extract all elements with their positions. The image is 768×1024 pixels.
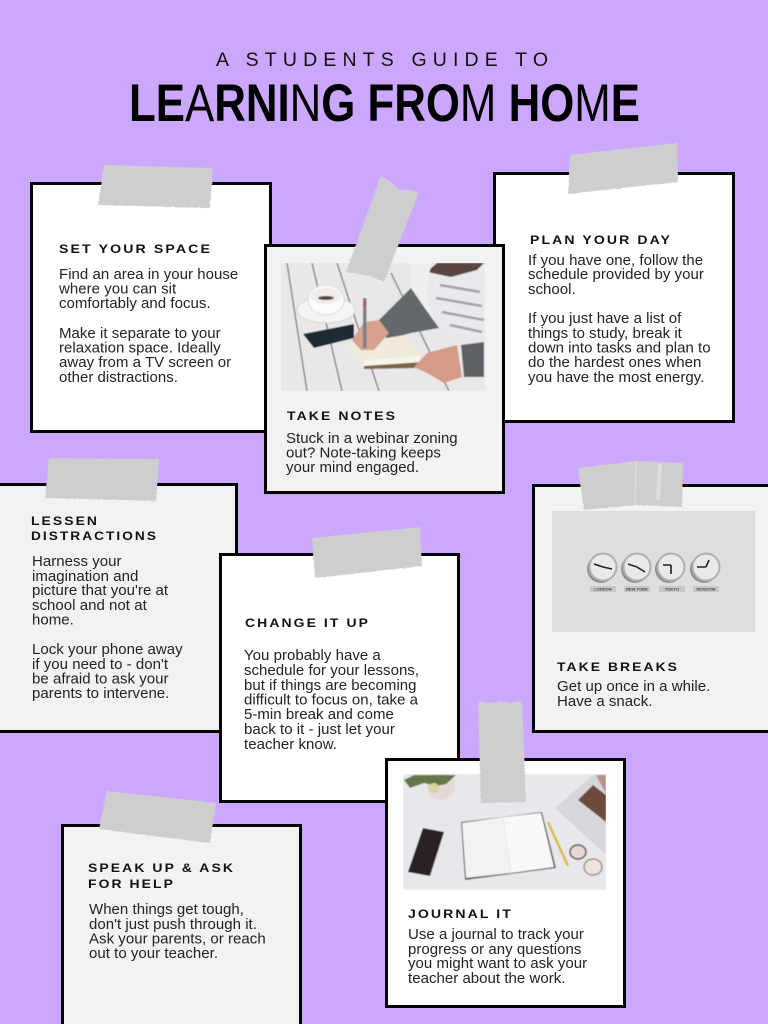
panel: set your space bbox=[32, 184, 270, 432]
text: take notes: out? Note-taking keeps bbox=[286, 444, 441, 462]
text: set your space: where you can sit bbox=[58, 280, 177, 298]
text: lessen distractions: imagination and bbox=[32, 568, 138, 585]
panel: lessen distractions bbox=[0, 484, 236, 732]
text: lessen distractions: Harness your bbox=[32, 553, 122, 570]
heading: take breaks: TAKE BREAKS bbox=[557, 660, 679, 674]
tape: set your space bbox=[98, 165, 213, 208]
text: lessen distractions: be afraid to ask your bbox=[32, 670, 169, 688]
tape: lessen distractions bbox=[45, 458, 159, 501]
photo: world clocks: TOKYO bbox=[665, 586, 679, 592]
tape: journal it bbox=[478, 701, 526, 803]
text: change it up: back to it - just let your bbox=[244, 721, 395, 738]
panel: plan your day bbox=[494, 174, 734, 422]
tape: take notes bbox=[346, 176, 419, 282]
photo: world clocks: MOSCOW bbox=[697, 586, 716, 592]
text: plan your day: do the hardest ones when bbox=[528, 354, 701, 371]
text: change it up: but if things are becoming bbox=[244, 677, 417, 694]
photo: desk with open journal bbox=[403, 772, 606, 890]
text: journal it: Use a journal to track your bbox=[408, 926, 584, 943]
text: lessen distractions: school and not at bbox=[32, 597, 148, 614]
text: speak up and ask for help: Ask your parents, or reach bbox=[89, 930, 266, 948]
text: plan your day: If you have one, follow the bbox=[528, 252, 703, 269]
heading: speak up and ask for help: FOR HELP bbox=[88, 877, 175, 891]
text: plan your day: down into tasks and plan to bbox=[528, 340, 711, 356]
text: set your space: other distractions. bbox=[59, 369, 178, 386]
text: change it up: difficult to focus on, take a bbox=[244, 692, 419, 708]
main heading: LEARNING FROM HOME bbox=[129, 74, 640, 133]
heading: lessen distractions: DISTRACTIONS bbox=[31, 529, 158, 543]
text: set your space: Find an area in your house bbox=[59, 266, 238, 283]
text: plan your day: If you just have a list of bbox=[528, 310, 682, 327]
text: set your space: Make it separate to your bbox=[59, 325, 221, 342]
panel: change it up bbox=[220, 554, 458, 802]
tape: take breaks bbox=[578, 461, 683, 510]
text: lessen distractions: Lock your phone away bbox=[32, 641, 183, 658]
text: change it up: teacher know. bbox=[244, 736, 337, 753]
text: take notes: Stuck in a webinar zoning bbox=[286, 430, 458, 447]
heading: plan your day: PLAN YOUR DAY bbox=[530, 233, 672, 247]
panel: take notes bbox=[266, 246, 504, 492]
text: journal it: progress or any questions bbox=[408, 941, 581, 958]
panel: take breaks bbox=[534, 486, 768, 732]
tape: change it up bbox=[312, 527, 422, 578]
text: set your space: comfortably and focus. bbox=[59, 295, 211, 312]
photo: woman writing in notebook bbox=[281, 263, 485, 391]
text: journal it: teacher about the work. bbox=[408, 970, 565, 987]
text: speak up and ask for help: don't just push through it. bbox=[89, 916, 257, 933]
photo: world clocks: LONDON bbox=[594, 586, 612, 592]
text: change it up: You probably have a bbox=[244, 647, 381, 664]
panel: speak up and ask for help bbox=[62, 826, 300, 1024]
text: take breaks: Have a snack. bbox=[557, 693, 652, 710]
text: plan your day: things to study, break it bbox=[528, 325, 683, 342]
heading: change it up: CHANGE IT UP bbox=[245, 616, 370, 630]
text: speak up and ask for help: When things get tough, bbox=[89, 901, 244, 918]
text: lessen distractions: if you need to - don't bbox=[32, 656, 169, 673]
text: journal it: you might want to ask your bbox=[408, 955, 587, 972]
heading: take notes: TAKE NOTES bbox=[287, 409, 397, 423]
text: plan your day: you have the most energy. bbox=[528, 369, 704, 386]
text: plan your day: school. bbox=[528, 281, 576, 298]
photo: world clocks bbox=[552, 511, 755, 632]
text: set your space: away from a TV screen or bbox=[59, 354, 231, 371]
text: take breaks: Get up once in a while. bbox=[557, 678, 710, 695]
text: lessen distractions: parents to intervene. bbox=[32, 685, 169, 702]
heading: speak up and ask for help: SPEAK UP & ASK bbox=[88, 861, 235, 875]
text: change it up: 5-min break and come bbox=[244, 706, 394, 723]
text: lessen distractions: picture that you're at bbox=[32, 582, 169, 599]
tape: speak up bbox=[99, 791, 216, 843]
text: plan your day: schedule provided by your bbox=[528, 266, 704, 283]
title bbox=[129, 49, 640, 133]
heading: lessen distractions: LESSEN bbox=[31, 514, 99, 528]
text: change it up: schedule for your lessons, bbox=[244, 662, 419, 679]
heading: set your space: SET YOUR SPACE bbox=[59, 242, 212, 256]
panel: journal it bbox=[386, 760, 624, 1006]
text: lessen distractions: home. bbox=[32, 612, 74, 628]
photo: world clocks: NEW YORK bbox=[626, 586, 648, 592]
heading: journal it: JOURNAL IT bbox=[408, 907, 513, 921]
text: speak up and ask for help: out to your teacher. bbox=[89, 945, 218, 962]
text: take notes: your mind engaged. bbox=[286, 459, 419, 476]
text: set your space: relaxation space. Ideally bbox=[59, 340, 221, 356]
subtitle: A STUDENTS GUIDE TO bbox=[216, 49, 548, 71]
tape: plan your day bbox=[568, 143, 678, 194]
